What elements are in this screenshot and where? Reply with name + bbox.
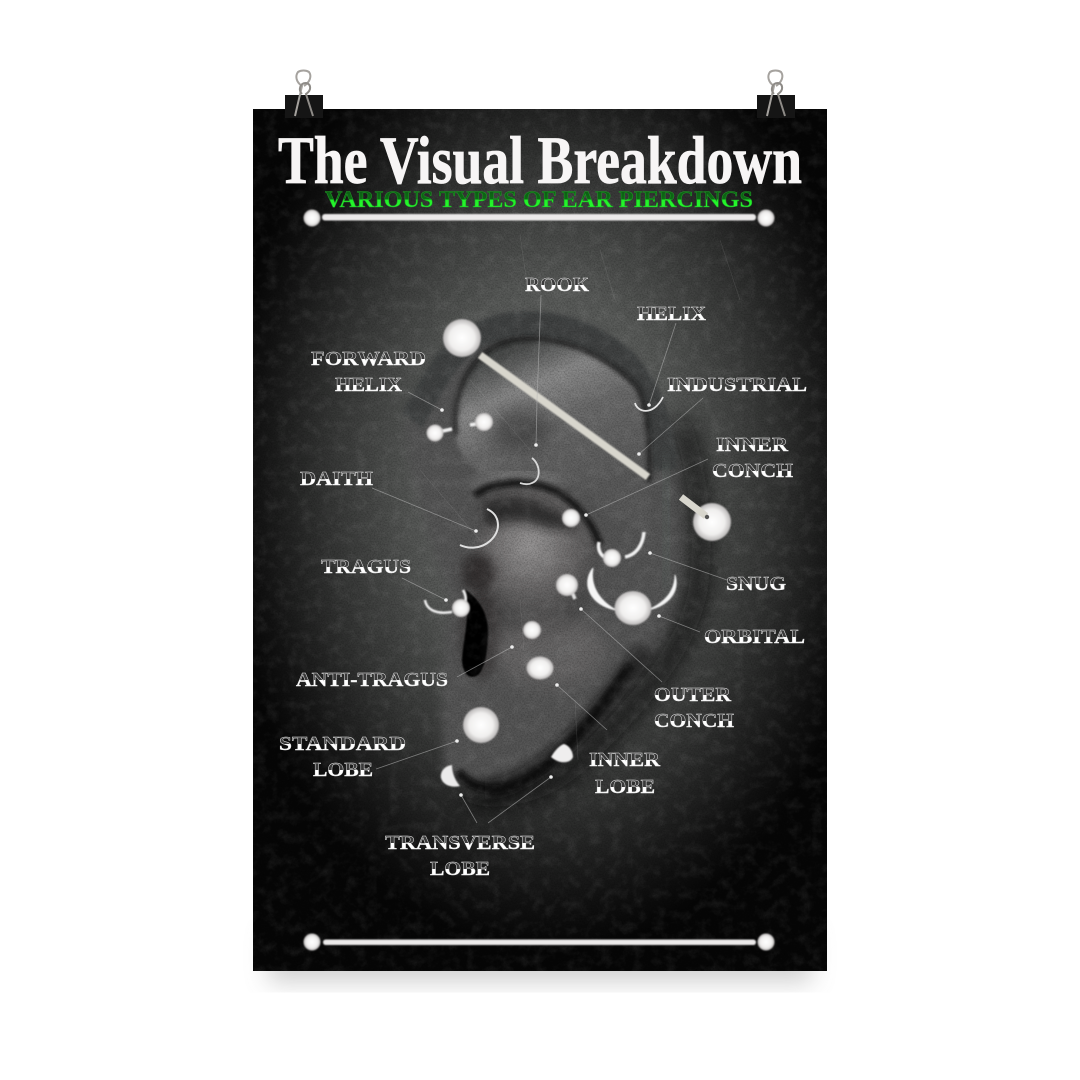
label: transverse lobe: TRANSVERSE — [385, 832, 535, 854]
labels — [279, 274, 807, 880]
label: transverse lobe: LOBE — [430, 858, 490, 880]
piercing: standard lobe — [463, 707, 499, 743]
piercing: forward helix stud — [426, 424, 452, 442]
title: The Visual Breakdown — [278, 122, 802, 198]
subtitle: VARIOUS TYPES OF EAR PIERCINGS — [325, 187, 753, 212]
piercing: outer conch stud — [556, 574, 578, 599]
piercing: snug — [599, 532, 644, 567]
ear canal — [462, 590, 488, 677]
label: inner conch: CONCH — [712, 460, 793, 482]
dark patch left of rook stud — [490, 408, 550, 452]
binder clip right — [757, 70, 795, 118]
piercing: inner lobe back — [551, 744, 573, 762]
piercing: transverse lobe — [441, 765, 460, 787]
poster panel — [253, 109, 827, 971]
piercing: rook stud — [470, 413, 493, 431]
poster drop shadow — [268, 930, 812, 982]
piercing: inner conch stud — [562, 509, 580, 527]
top divider barbell — [304, 210, 774, 226]
piercing: anti-tragus stud — [523, 621, 541, 639]
conch lit patch — [495, 615, 605, 685]
helix lower right band — [662, 466, 668, 468]
label: forward helix — [311, 352, 426, 392]
helix band — [412, 324, 666, 470]
label: outer conch: OUTER — [654, 684, 732, 706]
label: snug: SNUG — [726, 573, 786, 595]
label: inner conch: INNER — [716, 434, 789, 456]
scratched texture — [253, 109, 827, 971]
illustration: ear — [403, 314, 701, 797]
label: inner lobe: INNER — [589, 749, 661, 771]
piercing: tragus — [425, 590, 470, 617]
label: standard lobe: STANDARD — [279, 733, 406, 755]
label: standard lobe — [279, 733, 406, 781]
piercing: helix ring — [635, 397, 663, 411]
label: inner lobe — [589, 749, 661, 798]
label: rook: ROOK — [525, 274, 589, 296]
lobe crease — [458, 665, 630, 789]
scratches — [420, 235, 740, 760]
label: forward helix: HELIX — [335, 374, 403, 396]
piercing: inner lobe front — [526, 656, 554, 680]
piercing: rook ring — [520, 458, 539, 484]
piercing: daith ring — [460, 509, 498, 548]
label: tragus: TRAGUS — [321, 556, 411, 578]
label: inner conch — [712, 438, 793, 478]
barbell: industrial — [443, 319, 731, 541]
label: orbital: ORBITAL — [704, 626, 805, 648]
label: helix: HELIX — [637, 303, 707, 325]
antihelix ridge highlight — [470, 475, 560, 487]
concha bowl — [478, 490, 586, 632]
label: inner lobe: LOBE — [595, 776, 655, 798]
label: transverse lobe — [385, 832, 535, 880]
label: daith: DAITH — [300, 468, 373, 490]
label: standard lobe: LOBE — [313, 759, 373, 781]
leader lines and dots — [372, 295, 727, 823]
tragus shading — [460, 592, 500, 678]
label: outer conch — [654, 684, 734, 732]
binder clip left — [285, 70, 323, 118]
label: industrial: INDUSTRIAL — [667, 374, 807, 396]
label: forward helix: FORWARD — [311, 348, 426, 370]
bottom divider barbell — [304, 934, 774, 950]
label: outer conch: CONCH — [654, 710, 734, 732]
piercing: orbital — [588, 568, 676, 625]
scapha fossa — [454, 341, 647, 484]
label: anti-tragus: ANTI-TRAGUS — [296, 669, 448, 691]
